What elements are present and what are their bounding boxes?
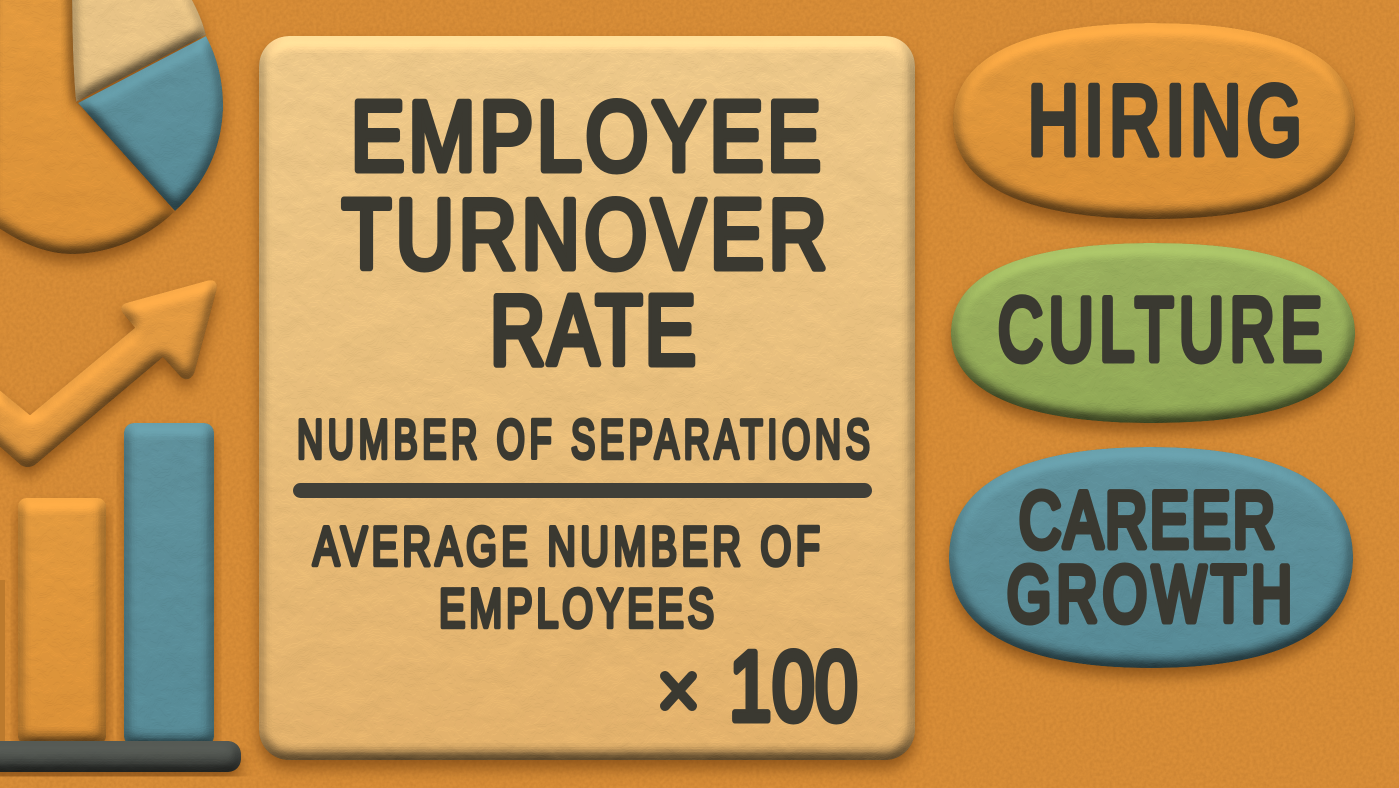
denominator line 2: EMPLOYEES: [439, 579, 714, 640]
title: employee turnover rate: [342, 81, 827, 385]
title line 3: RATE: [490, 275, 696, 385]
pill label line 2: GROWTH: [1007, 550, 1292, 638]
bar chart icon: [0, 423, 241, 772]
multiplier: [665, 631, 858, 741]
panel: formula card: [259, 36, 915, 760]
pill label: CULTURE: [998, 280, 1322, 380]
pill: hiring: [953, 23, 1355, 219]
pill shape: [953, 23, 1355, 219]
pie chart icon: [0, 0, 223, 254]
chart baseline: [0, 741, 241, 772]
title line 2: TURNOVER: [342, 179, 827, 289]
arrow icon: [0, 282, 215, 466]
multiply sign: [665, 676, 692, 706]
hundred: 100: [729, 631, 858, 741]
pill: culture: [951, 243, 1355, 423]
pill shape: [951, 243, 1355, 423]
denominator line 1: AVERAGE NUMBER OF: [313, 517, 820, 578]
fraction bar: [293, 483, 872, 498]
pill shape: [949, 447, 1353, 668]
bar: orange: [18, 498, 106, 744]
numerator: NUMBER OF SEPARATIONS: [297, 408, 870, 470]
bar: partial left bar: [0, 580, 5, 742]
title line 1: EMPLOYEE: [351, 81, 821, 191]
card base: [259, 36, 915, 760]
denominator: [313, 517, 820, 640]
pill: career growth: [949, 447, 1353, 668]
pill label: HIRING: [1028, 67, 1302, 176]
pill label line 1: CAREER: [1019, 475, 1275, 564]
pie slice: cream: [72, 0, 206, 102]
pie slice: orange: [0, 0, 174, 254]
bar: teal: [124, 423, 214, 746]
pie slice: teal: [78, 36, 223, 211]
